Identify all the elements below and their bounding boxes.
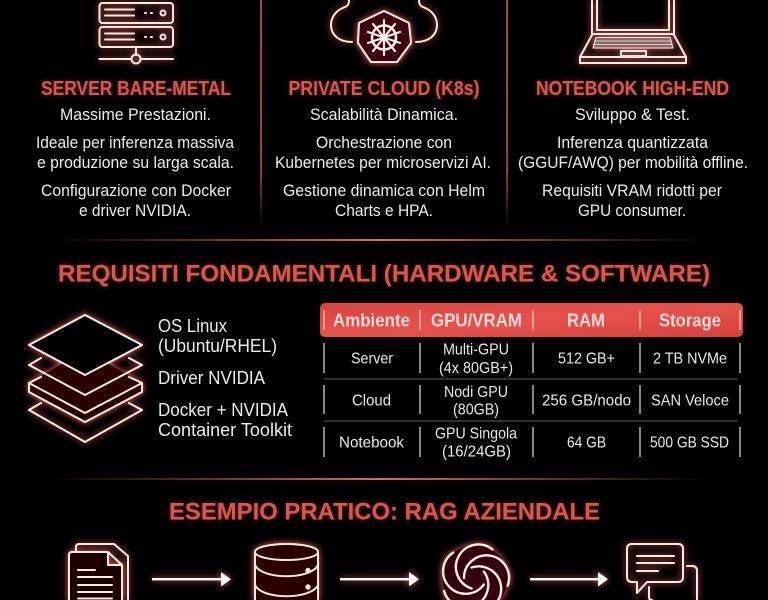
text block: cloud description: Kubernetes per microservizi AI. <box>275 154 491 172</box>
text block: server description <box>36 106 235 220</box>
table row: cloud: SAN Veloce <box>651 392 729 410</box>
arrow: model to chat <box>530 572 608 586</box>
text block: server description: Ideale per inferenza massiva <box>36 134 235 152</box>
text block: software requirements: Container Toolkit <box>158 419 292 440</box>
table row: server: (4x 80GB+) <box>439 360 513 377</box>
table header <box>320 303 743 337</box>
table row: cloud: Nodi GPU <box>444 384 508 401</box>
text block: cloud description <box>275 106 491 220</box>
icon: server rack <box>100 3 173 64</box>
table row: notebook <box>339 426 729 460</box>
arrow: documents to database <box>152 572 231 586</box>
heading: notebook high-end: NOTEBOOK HIGH-END <box>536 77 729 100</box>
text block: server description: Configurazione con Docker <box>41 182 231 200</box>
text block: software requirements: Docker + NVIDIA <box>158 399 289 420</box>
table header: RAM <box>567 310 605 330</box>
text block: notebook description: Sviluppo & Test. <box>575 106 690 124</box>
text block: software requirements: (Ubuntu/RHEL) <box>158 335 277 356</box>
table row: server: 512 GB+ <box>558 350 615 368</box>
table row: cloud <box>352 384 729 418</box>
icon: cloud with kubernetes wheel <box>331 0 437 62</box>
panel: notebook high-end <box>518 0 748 220</box>
table header: Storage <box>659 310 721 330</box>
icon: AI model swirl <box>434 539 509 600</box>
table row: notebook: (16/24GB) <box>442 444 511 460</box>
table row: notebook: 500 GB SSD <box>650 434 729 452</box>
table header: Ambiente <box>333 310 410 330</box>
table header: GPU/VRAM <box>431 310 522 330</box>
table row: server <box>351 342 727 377</box>
table row: server: Server <box>351 350 394 368</box>
text block: notebook description: (GGUF/AWQ) per mobilità offline. <box>518 154 748 172</box>
heading: esempio pratico: ESEMPIO PRATICO: RAG AZIENDALE <box>169 498 600 526</box>
arrow: database to model <box>340 572 419 586</box>
text block: server description: e produzione su larga scala. <box>37 154 234 172</box>
text block: software requirements: Driver NVIDIA <box>158 367 266 388</box>
table row: notebook: Notebook <box>339 434 405 452</box>
table row: cloud: 256 GB/nodo <box>542 392 631 410</box>
table row: server: 2 TB NVMe <box>653 350 727 368</box>
table row: cloud: Cloud <box>352 392 391 410</box>
icon: laptop <box>580 0 686 63</box>
heading: requisiti fondamentali: REQUISITI FONDAMENTALI (HARDWARE & SOFTWARE) <box>58 260 710 288</box>
table row: notebook: GPU Singola <box>435 426 517 442</box>
panel: server bare-metal <box>36 3 235 220</box>
heading: server bare-metal: SERVER BARE-METAL <box>41 77 231 100</box>
text block: server description: e driver NVIDIA. <box>79 202 191 220</box>
icon: database <box>255 544 318 600</box>
icon: chat bubbles <box>627 544 697 600</box>
heading: private cloud: PRIVATE CLOUD (K8s) <box>288 77 480 100</box>
text block: notebook description: Inferenza quantizzata <box>557 134 709 152</box>
table row: cloud: (80GB) <box>453 402 499 418</box>
text block: cloud description: Orchestrazione con <box>316 134 452 152</box>
text block: server description: Massime Prestazioni. <box>60 106 211 124</box>
panel: private cloud <box>275 0 491 220</box>
text block: cloud description: Gestione dinamica con Helm <box>283 182 485 200</box>
text block: notebook description: GPU consumer. <box>578 202 686 220</box>
text block: software requirements <box>158 315 292 440</box>
text block: notebook description: Requisiti VRAM ridotti per <box>542 182 722 200</box>
text block: cloud description: Charts e HPA. <box>335 202 433 220</box>
table row: server: Multi-GPU <box>443 342 509 358</box>
text block: software requirements: OS Linux <box>158 315 228 336</box>
text block: cloud description: Scalabilità Dinamica. <box>310 106 458 124</box>
table: hardware requirements <box>320 303 743 460</box>
table row: notebook: 64 GB <box>567 434 606 452</box>
text block: notebook description <box>518 106 748 220</box>
icon: documents <box>69 544 128 600</box>
icon: software stack layers <box>29 315 142 442</box>
